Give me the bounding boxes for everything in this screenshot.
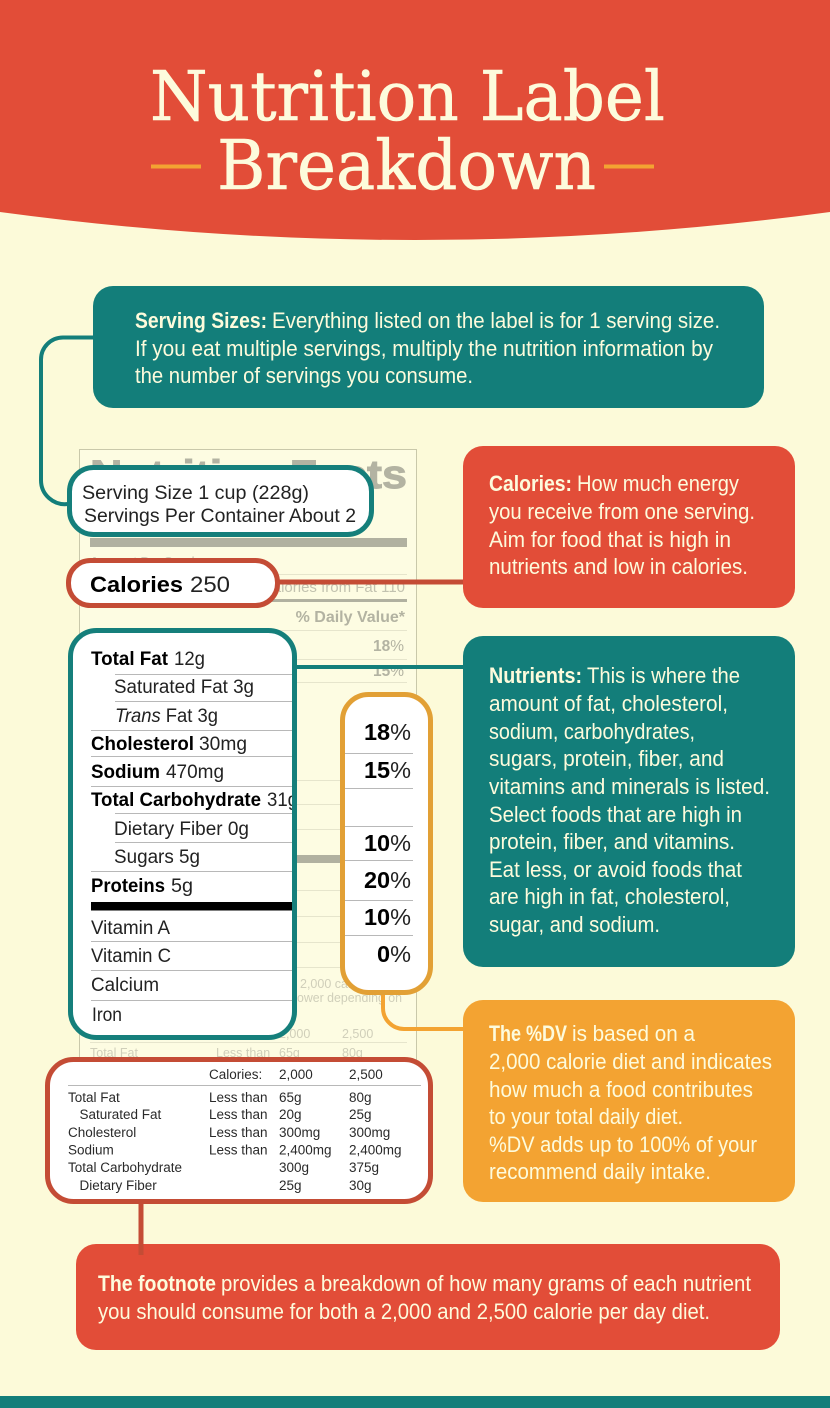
callout: nutrients: protein, fiber, and vitamins. [489, 829, 735, 854]
callout: percent daily value [463, 1000, 795, 1202]
faded nutrition label background: 2,000 calorie [300, 977, 372, 991]
callout: nutrients: sodium, carbohydrates, [489, 719, 695, 744]
highlight box: percent daily values: 10% [364, 830, 411, 856]
highlight box: nutrients: 31g [267, 790, 298, 811]
highlight box: nutrients: 470mg [166, 762, 224, 783]
highlight box: nutrients: Total Fat [91, 649, 169, 670]
callout: footnote: The footnote [98, 1271, 216, 1296]
highlight box: nutrients: Calcium [91, 975, 159, 996]
highlight box: footnote table: Less than [209, 1142, 268, 1158]
faded nutrition label background: 80g [342, 1046, 363, 1060]
callout: percent daily value: recommend daily intake. [489, 1159, 711, 1184]
highlight box: footnote table: 65g [279, 1090, 302, 1105]
highlight box: nutrients: 12g [174, 649, 205, 670]
callout: footnote: you should consume for both a 2,000 and 2,500 calorie per day diet. [98, 1299, 710, 1324]
faded nutrition label background: 65g [279, 1046, 300, 1060]
highlight box: nutrients: Vitamin A [91, 918, 170, 939]
callout: nutrients: are high in fat, cholesterol, [489, 884, 730, 909]
callout: percent daily value: %DV adds up to 100% of your [489, 1132, 757, 1157]
highlight box: percent daily values: 10% [364, 904, 411, 930]
highlight box: footnote table: Saturated Fat [80, 1107, 162, 1122]
highlight box: serving size [70, 468, 372, 534]
highlight box: nutrients: Vitamin C [91, 946, 171, 967]
highlight box: percent daily values: 20% [364, 867, 411, 893]
highlight box: footnote table: 2,000 [279, 1067, 313, 1082]
highlight box: nutrients [70, 630, 298, 1038]
faded nutrition label background: 2,500 [342, 1027, 373, 1041]
callout: percent daily value: is based on a [572, 1021, 695, 1046]
faded nutrition label background: 15% [373, 663, 404, 680]
highlight box: footnote table: Sodium [68, 1142, 114, 1158]
callout: serving sizes: the number of servings you consume. [135, 363, 473, 388]
highlight box: footnote table: Total Carbohydrate [68, 1160, 182, 1175]
callout: nutrients: Nutrients: [489, 663, 582, 688]
highlight box: footnote table: 80g [349, 1090, 372, 1105]
faded nutrition label background: Total Fat [90, 1046, 138, 1060]
highlight box: nutrients: 30mg [199, 734, 247, 755]
highlight box: nutrients: Sugars 5g [114, 847, 200, 868]
highlight box: footnote table: 2,500 [349, 1067, 383, 1082]
callout: nutrients [463, 636, 795, 967]
callout: nutrients: sugars, protein, fiber, and [489, 746, 724, 771]
faded nutrition label background: Less than [216, 1046, 270, 1060]
highlight box: nutrients: Trans Fat 3g [115, 706, 218, 727]
callout: footnote: provides a breakdown of how many grams of each nutrient [221, 1271, 752, 1296]
highlight box: footnote table: 25g [349, 1107, 372, 1122]
highlight box: nutrients: Dietary Fiber 0g [114, 819, 249, 840]
connector: percent daily value [383, 993, 464, 1029]
callout: nutrients: Eat less, or avoid foods that [489, 857, 743, 882]
highlight box: footnote table [48, 1060, 430, 1202]
highlight box: calories: Calories [90, 572, 183, 597]
highlight box: footnote table: 300mg [349, 1125, 390, 1140]
callout: calories [463, 446, 795, 608]
connector: serving sizes [41, 338, 93, 504]
highlight box: footnote table: 2,400mg [279, 1142, 332, 1158]
header banner [0, 0, 830, 240]
faded nutrition label background: Amount Per Serving [90, 555, 210, 569]
highlight box: footnote table: Calories: [209, 1067, 262, 1082]
callout: calories: nutrients and low in calories. [489, 554, 748, 579]
footer band [0, 1396, 830, 1408]
highlight box: footnote table: Total Fat [68, 1090, 120, 1105]
callout: nutrients: This is where the [587, 663, 740, 688]
highlight box: footnote table: 375g [349, 1160, 379, 1175]
highlight box: serving size: Serving Size 1 cup (228g) [82, 482, 309, 504]
faded nutrition label background [80, 450, 416, 1090]
highlight box: percent daily values: 0% [377, 941, 411, 967]
callout: nutrients: amount of fat, cholesterol, [489, 691, 728, 716]
highlight box: nutrients: Total Carbohydrate [91, 790, 261, 811]
title [150, 58, 665, 206]
callout: percent daily value: to your total daily diet. [489, 1104, 683, 1129]
highlight box: nutrients: Proteins [91, 876, 165, 897]
highlight box: nutrients: 5g [171, 876, 193, 897]
faded nutrition label background: Calories from Fat 110 [262, 579, 405, 596]
callout: calories: Calories: [489, 471, 572, 496]
callout: serving sizes: If you eat multiple servings, multiply the nutrition information by [135, 336, 714, 361]
callout: percent daily value: how much a food contributes [489, 1077, 753, 1102]
highlight box: percent daily values: 18% [364, 719, 411, 745]
highlight box: percent daily values [342, 694, 430, 992]
callout: nutrients: sugar, and sodium. [489, 912, 660, 937]
callout: calories: you receive from one serving. [489, 499, 755, 524]
callout: serving sizes: Serving Sizes: [135, 308, 267, 333]
highlight box: calories: 250 [190, 572, 230, 597]
callout: nutrients: vitamins and minerals is listed. [489, 774, 770, 799]
title: Breakdown [217, 127, 596, 206]
title: Nutrition Label [150, 58, 665, 137]
faded nutrition label background: % Daily Value* [296, 609, 406, 626]
highlight box: percent daily values: 15% [364, 757, 411, 783]
highlight box: footnote table: 2,400mg [349, 1142, 402, 1158]
callout: percent daily value: 2,000 calorie diet and indicates [489, 1049, 772, 1074]
callout: calories: Aim for food that is high in [489, 527, 731, 552]
highlight box: nutrients: Sodium [91, 762, 160, 783]
highlight box: nutrients: Iron [92, 1005, 122, 1026]
highlight box: footnote table: 300mg [279, 1125, 320, 1140]
highlight box: serving size: Servings Per Container About 2 [84, 505, 356, 527]
callout: footnote [76, 1244, 780, 1350]
callout: calories: How much energy [577, 471, 740, 496]
faded nutrition label background: 2,000 [279, 1027, 310, 1041]
highlight box: calories [68, 560, 278, 606]
callout: percent daily value: The %DV [489, 1021, 567, 1046]
highlight box: footnote table: 25g [279, 1178, 302, 1193]
highlight box: footnote table: 20g [279, 1107, 302, 1122]
connector: footnote [138, 1203, 144, 1255]
faded nutrition label background: Nutrition Facts [90, 453, 407, 497]
callout: serving sizes: Everything listed on the label is for 1 serving size. [272, 308, 720, 333]
faded nutrition label background: ower depending on [297, 991, 402, 1005]
highlight box: nutrients: Saturated Fat 3g [114, 677, 254, 698]
highlight box: footnote table: Less than [209, 1125, 268, 1140]
callout: serving sizes [93, 286, 764, 408]
highlight box: nutrients: Cholesterol [91, 734, 194, 755]
highlight box: footnote table: Dietary Fiber [80, 1178, 157, 1193]
highlight box: footnote table: Less than [209, 1090, 268, 1105]
highlight box: footnote table: 30g [349, 1178, 372, 1193]
highlight box: footnote table: 300g [279, 1160, 309, 1175]
callout: nutrients: Select foods that are high in [489, 802, 742, 827]
highlight box: footnote table: Less than [209, 1107, 268, 1122]
connector: calories [278, 580, 464, 584]
connector: nutrients [295, 665, 464, 669]
highlight box: footnote table: Cholesterol [68, 1125, 136, 1140]
faded nutrition label background: 18% [373, 638, 404, 655]
